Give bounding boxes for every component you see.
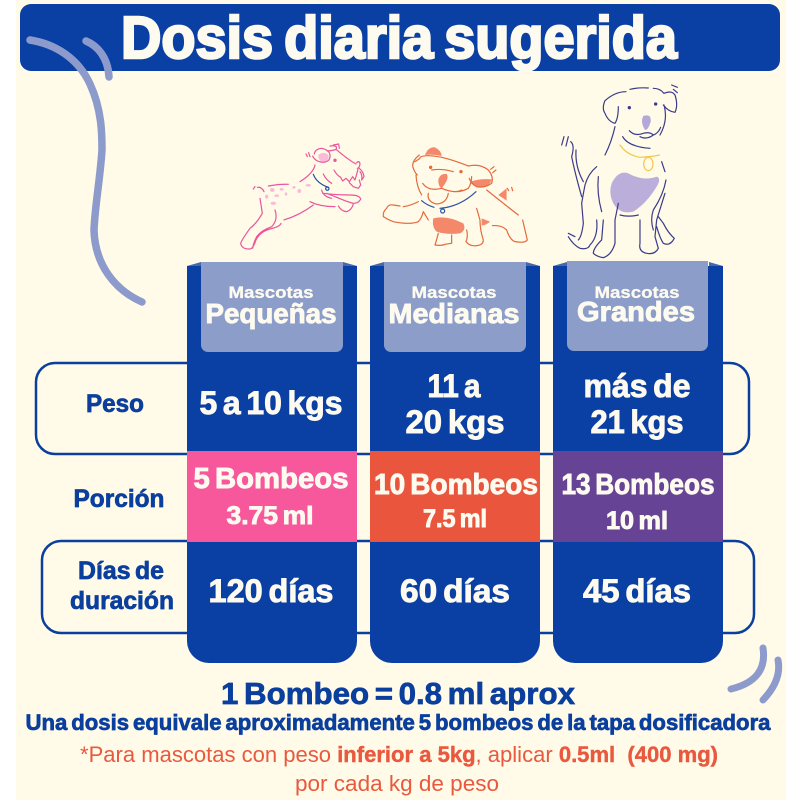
portion band	[187, 451, 357, 542]
decorative squiggle top left	[30, 40, 142, 302]
duration value: 45 días	[583, 573, 691, 609]
row outline: dias de duracion	[42, 541, 754, 633]
column: mascotas grandes: Grandes	[577, 296, 695, 327]
column: mascotas medianas: 20 kgs	[406, 404, 504, 440]
column heading: Mascotas	[412, 284, 496, 302]
column: mascotas grandes: 21 kgs	[590, 404, 684, 440]
column: mascotas medianas	[370, 262, 540, 663]
column: mascotas pequenas: 5 Bombeos	[194, 463, 348, 495]
duration value: 120 días	[208, 573, 334, 609]
portion band	[553, 451, 723, 542]
icon: medium bulldog	[383, 147, 527, 246]
text: dose note: Una dosis equivale aproximadamente 5 bombeos de la tapa dosificadora	[26, 710, 771, 735]
row label: dias de duracion: Días de	[78, 557, 164, 585]
text: per kg: por cada kg de peso	[295, 771, 499, 796]
column: mascotas grandes: 13 Bombeos	[562, 469, 714, 501]
column: mascotas grandes	[553, 261, 723, 663]
column: mascotas grandes: 10 ml	[606, 507, 668, 535]
row outline: peso	[36, 363, 749, 454]
column: mascotas pequenas: 3.75 ml	[226, 502, 314, 530]
column: mascotas pequenas	[187, 262, 357, 663]
column: mascotas medianas: Medianas	[388, 298, 520, 329]
row label: dias de duracion	[70, 557, 174, 615]
peso value: 11 a	[428, 368, 481, 404]
peso value: más de	[584, 368, 690, 404]
column heading: Mascotas	[228, 284, 314, 302]
text: small pet warning: *Para mascotas con peso inferior a 5kg, aplicar 0.5ml (400 mg)	[80, 742, 718, 767]
row label: peso: Peso	[86, 390, 144, 418]
header banner	[20, 4, 780, 71]
duration value: 60 días	[400, 573, 510, 609]
row label: dias de duracion: duración	[70, 587, 174, 615]
column: mascotas medianas: 10 Bombeos	[374, 469, 538, 501]
row label: porcion: Porción	[74, 485, 164, 513]
column heading: Mascotas	[594, 284, 680, 302]
icon: small jumping dog	[241, 144, 364, 249]
column: mascotas pequenas: Pequeñas	[206, 298, 336, 329]
title: Dosis diaria sugerida	[121, 5, 678, 71]
decorative squiggle bottom right	[731, 648, 779, 700]
peso value: 5 a 10 kgs	[200, 385, 342, 421]
icon: large dog	[562, 85, 677, 258]
column: mascotas medianas: 7.5 ml	[423, 505, 487, 533]
portion band	[370, 451, 540, 542]
text: bombeo equivalence: 1 Bombeo = 0.8 ml aprox	[221, 676, 576, 711]
